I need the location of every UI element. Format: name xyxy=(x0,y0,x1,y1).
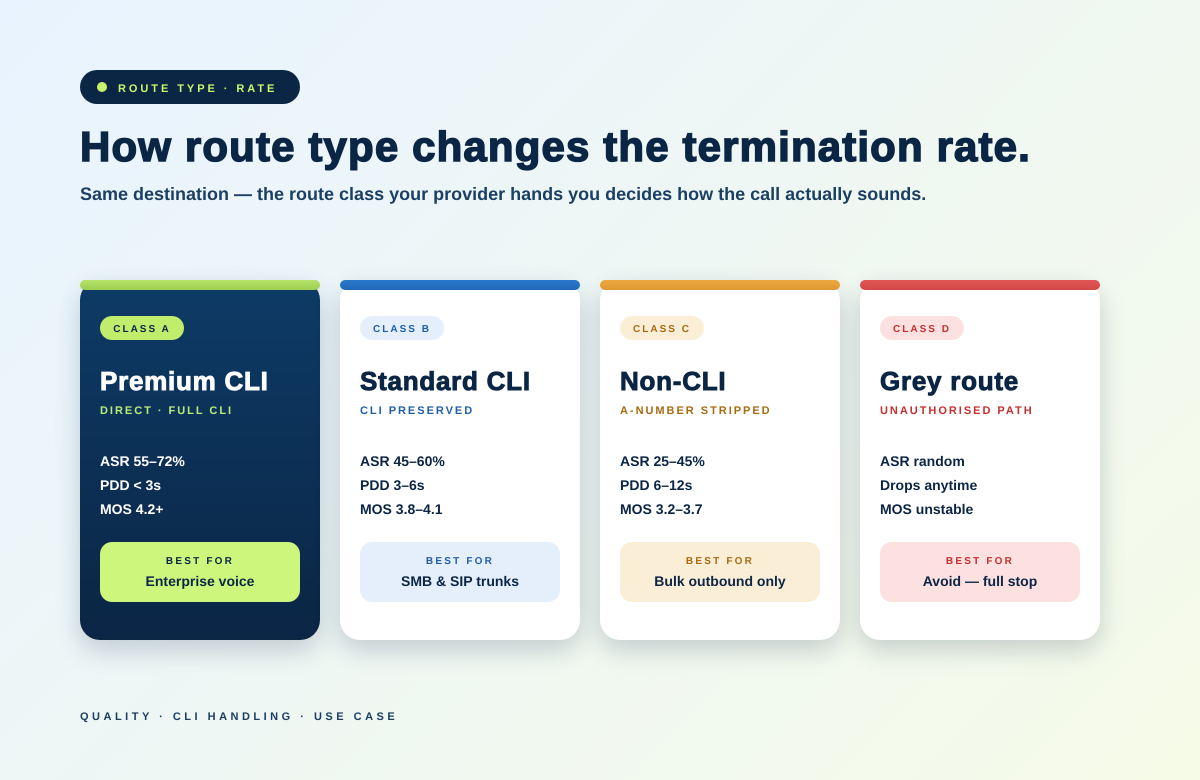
panel: class C non-CLI xyxy=(600,280,840,640)
card heading A: Premium CLI xyxy=(100,366,269,396)
class badge C xyxy=(620,316,704,340)
panel: class A premium CLI xyxy=(80,280,320,640)
best for label D: BEST FOR xyxy=(946,556,1014,567)
card subheading D: UNAUTHORISED PATH xyxy=(880,405,1034,417)
card subheading A: DIRECT · FULL CLI xyxy=(100,405,233,417)
metrics D xyxy=(880,453,977,517)
class badge B xyxy=(360,316,444,340)
metrics B: MOS 3.8–4.1 xyxy=(360,501,442,517)
metrics C: ASR 25–45% xyxy=(620,453,705,469)
metrics D: ASR random xyxy=(880,453,965,469)
eyebrow pill xyxy=(80,70,300,104)
card heading D: Grey route xyxy=(880,366,1019,396)
class badge A xyxy=(100,316,184,340)
metrics B: PDD 3–6s xyxy=(360,477,425,493)
accent bar A xyxy=(80,280,320,290)
eyebrow label: ROUTE TYPE · RATE xyxy=(118,83,277,95)
metrics B xyxy=(360,453,445,517)
card heading B: Standard CLI xyxy=(360,366,531,396)
best for C xyxy=(620,542,820,602)
subtitle: Same destination — the route class your provider hands you decides how the call actually sounds. xyxy=(80,184,926,204)
accent bar B xyxy=(340,280,580,290)
metrics A: ASR 55–72% xyxy=(100,453,185,469)
class badge C: CLASS C xyxy=(633,324,691,335)
card subheading C: A-NUMBER STRIPPED xyxy=(620,405,772,417)
best for label C: BEST FOR xyxy=(686,556,754,567)
best for value D: Avoid — full stop xyxy=(923,573,1037,589)
best for value A: Enterprise voice xyxy=(146,573,254,589)
metrics B: ASR 45–60% xyxy=(360,453,445,469)
metrics A: PDD < 3s xyxy=(100,477,161,493)
card subheading B: CLI PRESERVED xyxy=(360,405,474,417)
best for label B: BEST FOR xyxy=(426,556,494,567)
metrics C xyxy=(620,453,705,517)
class badge A: CLASS A xyxy=(113,324,171,335)
class badge D: CLASS D xyxy=(893,324,951,335)
class badge B: CLASS B xyxy=(373,324,431,335)
accent bar D xyxy=(860,280,1100,290)
metrics A: MOS 4.2+ xyxy=(100,501,163,517)
accent bar C xyxy=(600,280,840,290)
best for D xyxy=(880,542,1080,602)
class badge D xyxy=(880,316,964,340)
best for A xyxy=(100,542,300,602)
best for B xyxy=(360,542,560,602)
metrics C: MOS 3.2–3.7 xyxy=(620,501,702,517)
best for value B: SMB & SIP trunks xyxy=(401,573,519,589)
footer tagline: QUALITY · CLI HANDLING · USE CASE xyxy=(80,711,398,723)
metrics D: MOS unstable xyxy=(880,501,973,517)
panel: class B standard CLI xyxy=(340,280,580,640)
metrics D: Drops anytime xyxy=(880,477,977,493)
icon: status dot xyxy=(97,82,107,92)
panel: class D grey route xyxy=(860,280,1100,640)
best for value C: Bulk outbound only xyxy=(654,573,786,589)
best for label A: BEST FOR xyxy=(166,556,234,567)
title: How route type changes the termination rate. xyxy=(80,123,1031,170)
metrics A xyxy=(100,453,185,517)
card heading C: Non-CLI xyxy=(620,366,726,396)
metrics C: PDD 6–12s xyxy=(620,477,692,493)
